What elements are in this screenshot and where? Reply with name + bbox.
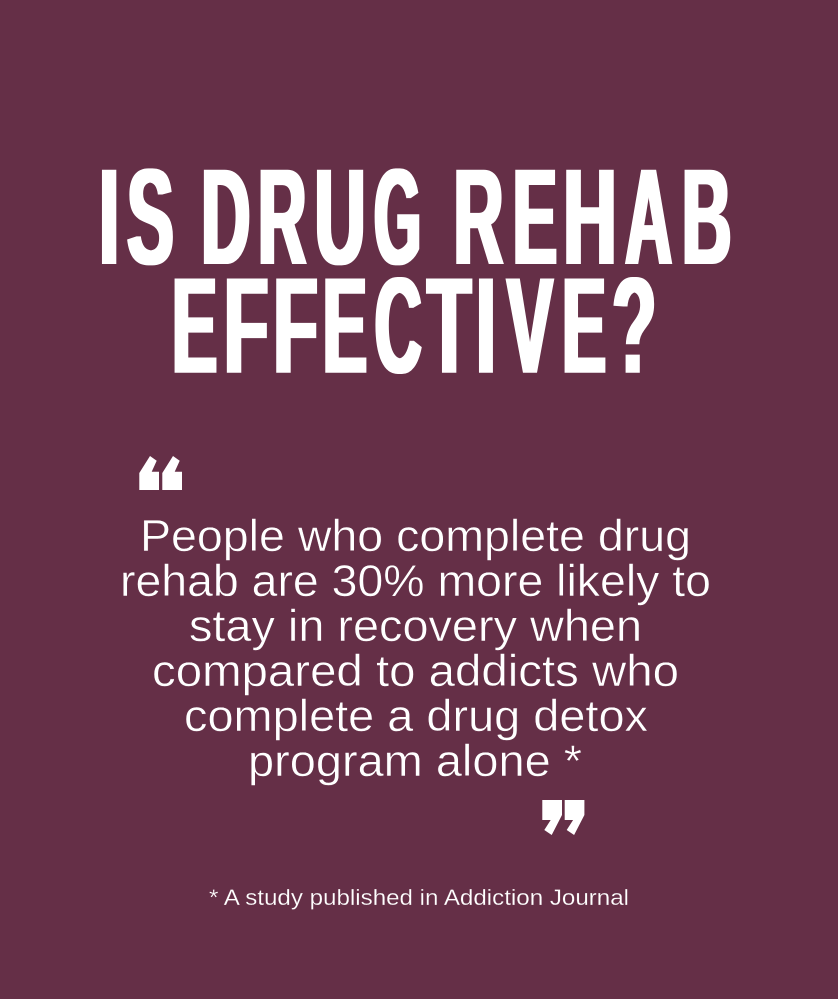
title: S: [127, 142, 174, 294]
footnote: * A study published in Addiction Journal: [209, 885, 629, 910]
quote text: stay in recovery when: [189, 602, 642, 651]
quote text: program alone *: [248, 737, 582, 786]
title: V: [507, 249, 553, 402]
title: E: [513, 140, 557, 293]
title: E: [172, 248, 217, 402]
title: G: [374, 141, 421, 294]
title: R: [258, 139, 306, 293]
title: H: [563, 141, 617, 294]
quote text: People who complete drug: [140, 512, 691, 561]
icon: opening quotation mark: [139, 456, 182, 490]
title: E: [323, 249, 367, 402]
title: E: [562, 249, 606, 402]
title: [99, 139, 731, 403]
title: I: [99, 141, 119, 294]
quote text: rehab are 30% more likely to: [120, 557, 711, 606]
title: ?: [612, 250, 656, 403]
title: T: [427, 250, 471, 403]
title: U: [315, 141, 365, 294]
title: I: [476, 249, 496, 402]
quote text: [120, 512, 711, 786]
quote text: complete a drug detox: [184, 692, 648, 741]
icon: closing quotation mark: [542, 800, 584, 835]
title: C: [375, 249, 422, 402]
quote text: compared to addicts who: [152, 647, 679, 696]
title: B: [682, 140, 731, 293]
title: D: [201, 140, 250, 293]
title: F: [273, 250, 318, 403]
title: F: [224, 250, 268, 403]
title: R: [454, 140, 503, 293]
title: A: [625, 140, 672, 293]
